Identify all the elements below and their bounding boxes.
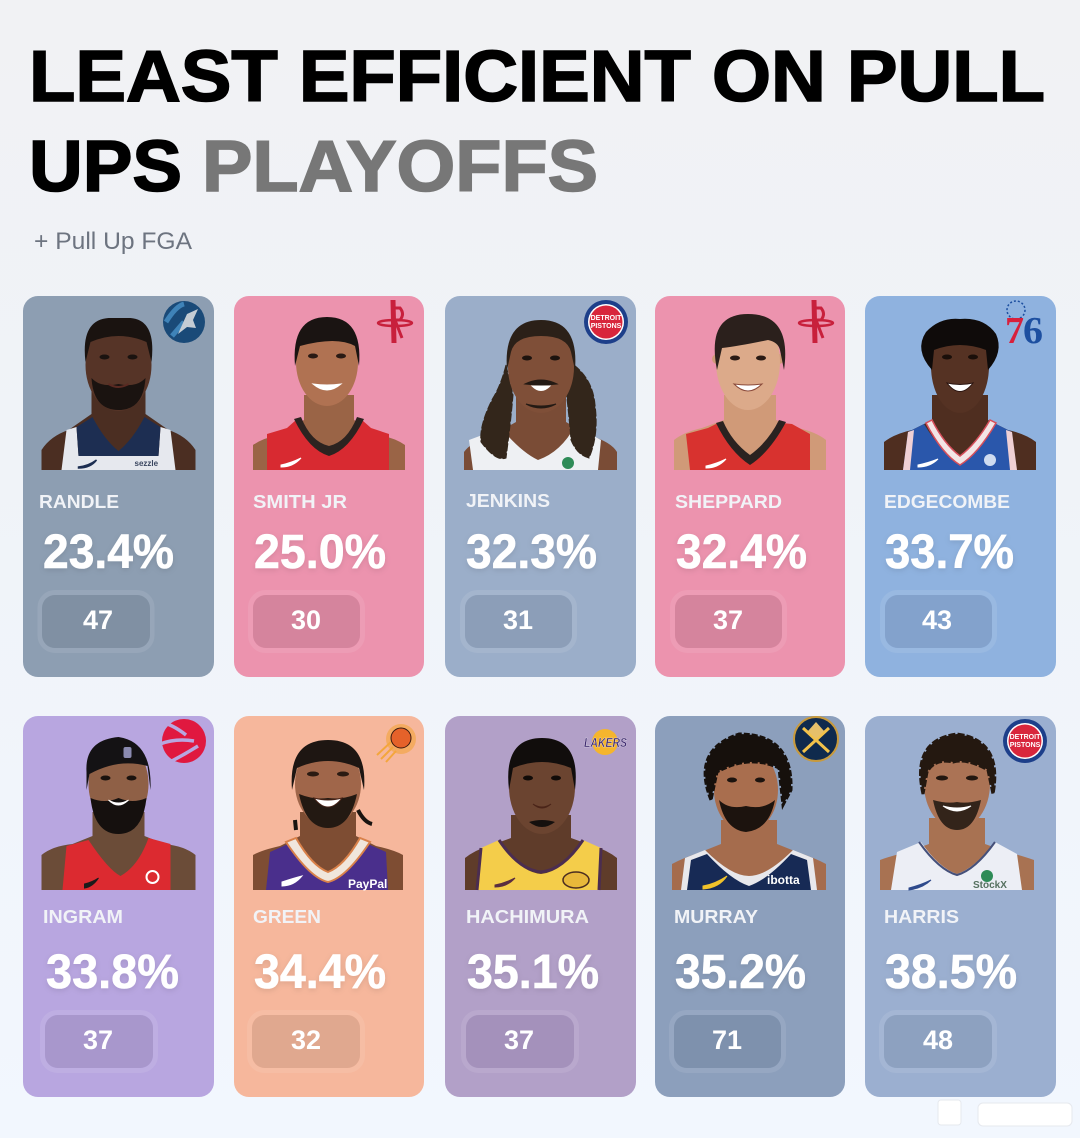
count pill	[42, 1012, 156, 1070]
count pill	[464, 1012, 576, 1070]
portrait: Ingram	[42, 737, 196, 890]
logo: Nuggets	[794, 717, 838, 761]
portrait: Randle: sezzle	[134, 459, 159, 468]
portrait: Green	[253, 740, 403, 891]
percentage: 25.0%	[254, 526, 386, 579]
count pill: 32	[291, 1025, 321, 1055]
logo: 76ers: 7	[1005, 310, 1024, 352]
logo: Suns	[377, 724, 416, 762]
percentage: 32.3%	[466, 526, 597, 579]
count pill	[882, 592, 994, 650]
name: SMITH JR	[253, 492, 347, 512]
card: Murray	[655, 716, 845, 1097]
logo: Pistons: PISTONS	[1010, 742, 1041, 749]
portrait: Sheppard	[674, 314, 826, 470]
portrait: Green: PayPal	[348, 877, 387, 891]
card: Randle	[23, 296, 214, 677]
card: Hachimura	[445, 716, 636, 1097]
card: Smith Jr	[234, 296, 424, 677]
count pill	[462, 592, 574, 650]
card: Jenkins	[445, 296, 636, 677]
count pill: 48	[923, 1025, 953, 1055]
logo: Lakers: LAKERS	[584, 735, 627, 750]
percentage: 35.2%	[675, 946, 806, 999]
count pill	[40, 592, 152, 650]
name: SHEPPARD	[675, 492, 782, 512]
logo: Pistons: DETROIT	[1010, 734, 1041, 741]
name: INGRAM	[43, 907, 123, 927]
card: Edgecombe	[865, 296, 1056, 677]
logo: Pistons	[1003, 719, 1047, 763]
card: Green	[234, 716, 424, 1097]
portrait: Murray: ibotta	[767, 873, 800, 887]
name: HARRIS	[884, 907, 959, 927]
watermark	[938, 1100, 1072, 1126]
portrait: Harris	[880, 734, 1034, 891]
count pill: 37	[83, 1025, 113, 1055]
name: GREEN	[253, 907, 321, 927]
portrait: Murray	[672, 734, 826, 890]
name: RANDLE	[39, 492, 119, 512]
logo: Pistons: DETROIT	[591, 315, 622, 322]
count pill	[672, 1012, 784, 1070]
logo: Lakers	[584, 729, 627, 755]
percentage: 32.4%	[676, 526, 807, 579]
name: EDGECOMBE	[884, 492, 1010, 512]
count pill	[882, 1012, 994, 1070]
percentage: 38.5%	[885, 946, 1017, 999]
count pill	[672, 592, 784, 650]
card: Sheppard	[655, 296, 845, 677]
percentage: 33.7%	[885, 526, 1014, 579]
logo: 76ers: 6	[1023, 310, 1043, 352]
logo: 76ers	[1005, 301, 1043, 352]
percentage: 35.1%	[467, 946, 599, 999]
title: LEAST EFFICIENT ON PULL	[29, 37, 1045, 117]
portrait: Hachimura	[465, 738, 617, 890]
logo: Pistons	[584, 300, 628, 344]
count pill	[250, 1012, 362, 1070]
title: UPS	[29, 127, 182, 207]
count pill	[250, 592, 362, 650]
portrait: Edgecombe	[884, 319, 1036, 470]
count pill: 30	[291, 605, 321, 635]
portrait: Randle	[42, 318, 196, 470]
name: HACHIMURA	[466, 907, 589, 927]
name: JENKINS	[466, 491, 550, 511]
percentage: 23.4%	[43, 526, 174, 579]
count pill: 43	[922, 605, 952, 635]
logo: Rockets	[378, 300, 412, 343]
logo: Raptors	[160, 718, 206, 764]
count pill: 71	[712, 1025, 742, 1055]
title: PLAYOFFS	[202, 127, 598, 207]
percentage: 33.8%	[46, 946, 179, 999]
portrait: Smith Jr	[253, 317, 405, 470]
count pill: 37	[713, 605, 743, 635]
logo: Timberwolves	[163, 301, 205, 343]
name: MURRAY	[674, 907, 758, 927]
logo: Pistons: PISTONS	[591, 323, 622, 330]
portrait: Jenkins	[464, 320, 617, 470]
card: Ingram	[23, 716, 214, 1097]
count pill: 37	[504, 1025, 534, 1055]
percentage: 34.4%	[254, 946, 386, 999]
subtitle: + Pull Up FGA	[34, 228, 192, 255]
count pill: 31	[503, 605, 533, 635]
count pill: 47	[83, 605, 113, 635]
title	[29, 37, 1045, 207]
card: Harris	[865, 716, 1056, 1097]
portrait: Harris: StockX	[973, 880, 1007, 891]
logo: Rockets	[799, 300, 833, 343]
